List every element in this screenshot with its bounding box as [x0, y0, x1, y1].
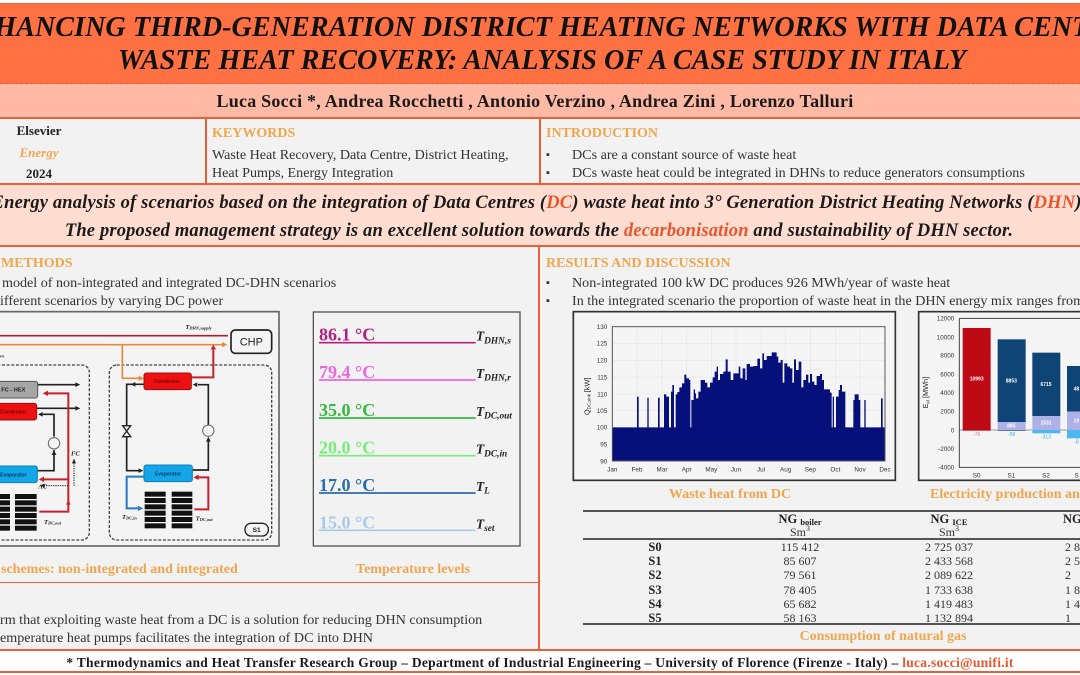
y axis labels: 6000 — [940, 371, 955, 378]
right scheme: DC,out — [199, 517, 213, 522]
y axis labels — [937, 316, 955, 472]
bar S1: 885 — [1007, 424, 1016, 430]
row S5 — [648, 611, 1071, 625]
row S2 — [648, 568, 1071, 582]
right scheme: T — [122, 514, 126, 521]
y axis labels: 105 — [597, 408, 608, 415]
bar S3: 48 — [1074, 387, 1079, 393]
level: T set: T — [476, 516, 484, 531]
bar S0: 10993 — [970, 377, 984, 383]
methods bullets — [0, 275, 336, 309]
x axis labels: Jun — [731, 466, 742, 473]
x axis labels: Oct — [830, 466, 840, 473]
row S2: 2 089 622 — [925, 568, 973, 582]
y axis labels: 8000 — [940, 353, 955, 360]
level: T DC,in — [319, 438, 507, 459]
y axis labels: 2000 — [940, 409, 955, 416]
results bullets: In the integrated scenario the proportion of waste heat in the DHN energy mix ranges from — [572, 293, 1080, 309]
level: T DHN,s: T — [476, 329, 484, 344]
y axis labels: 130 — [597, 324, 608, 331]
methods heading: METHODS — [1, 256, 73, 271]
introduction heading: INTRODUCTION — [546, 126, 658, 141]
row S1: S1 — [648, 554, 662, 568]
level: T L: T — [476, 479, 484, 494]
chart: waste heat from DC — [572, 310, 896, 482]
y axis labels: 90 — [600, 458, 608, 465]
row S1 — [648, 554, 1080, 568]
diagram: non-integrated and integrated schemes: rn — [0, 353, 5, 358]
bar S2 — [1032, 353, 1060, 440]
table header: NG ICE — [930, 512, 968, 527]
y axis title: [MWh] — [921, 377, 930, 400]
CHP box — [231, 330, 272, 353]
row S0: 2 725 037 — [925, 540, 973, 554]
bar S1 — [998, 339, 1026, 438]
supply and return lines — [0, 336, 228, 381]
table rules — [583, 510, 1080, 540]
introduction bullets: ▪ — [546, 149, 550, 161]
journal name: Energy — [20, 145, 58, 160]
bar S3 — [1067, 366, 1080, 445]
row S2: S2 — [648, 568, 662, 582]
level: T DHN,s: 86.1 °C — [319, 325, 375, 345]
y axis labels: 4000 — [940, 390, 955, 397]
methods bullets: ifferent scenarios by varying DC power — [0, 293, 223, 309]
bar S0: -76 — [973, 432, 980, 438]
keywords text — [212, 147, 509, 181]
level: T set — [319, 512, 495, 534]
row S3: 78 405 — [784, 583, 816, 597]
left scheme: FC — [71, 450, 80, 457]
conclusions text: rm that exploiting waste heat from a DC is a solution for reducing DHN consumption — [0, 612, 482, 628]
conclusions text: emperature heat pumps facilitates the integration of DC into DHN — [0, 630, 373, 646]
y axis title: Q — [582, 409, 591, 415]
x axis labels: S — [1075, 473, 1079, 480]
right scheme — [122, 373, 268, 536]
table bottom rule — [583, 623, 1080, 625]
bar S0 — [963, 328, 991, 438]
introduction bullets: DCs waste heat could be integrated in DHNs to reduce generators consumptions — [572, 165, 1025, 181]
table header — [778, 512, 1080, 538]
x axis labels: Nov — [854, 466, 866, 473]
keywords heading: KEYWORDS — [212, 126, 295, 141]
introduction bullets — [546, 147, 1025, 181]
bar S2: 1531 — [1040, 421, 1052, 427]
row S4 — [648, 597, 1080, 611]
right scheme: Evaporator — [155, 472, 181, 478]
level: T L: L — [483, 487, 490, 497]
row S4: 1 419 483 — [925, 597, 973, 611]
row S3 — [648, 583, 1080, 597]
x axis labels: Mar — [657, 466, 667, 473]
caption: natural gas: Consumption of natural gas — [800, 629, 966, 644]
level: T DHN,r: T — [476, 366, 484, 381]
y axis labels: 10000 — [937, 334, 955, 341]
authors: Luca Socci *, Andrea Rocchetti , Antonio Verzino , Andrea Zini , Lorenzo Talluri — [217, 91, 853, 111]
publisher: Elsevier — [17, 123, 61, 138]
level: T DHN,r: 79.4 °C — [319, 362, 375, 382]
level: T DHN,s — [319, 325, 511, 346]
affiliation: * Thermodynamics and Heat Transfer Research Group – Department of Industrial Engineering – University of Florence (Firenze - Italy) – luca.socci@unifi.it — [66, 655, 1014, 670]
left scheme: T — [44, 519, 48, 526]
y axis labels: 12000 — [937, 316, 955, 323]
x axis labels: S0 — [973, 473, 981, 480]
panel: results and discussion — [540, 247, 1080, 650]
row S2: 2 — [1065, 568, 1071, 582]
panel: keywords — [207, 117, 541, 185]
row S3: 1 733 638 — [925, 583, 973, 597]
right scheme: T — [196, 515, 200, 522]
row S1: 2 433 568 — [925, 554, 973, 568]
table header: NG boiler — [778, 512, 822, 527]
left scheme: DC,out — [47, 521, 62, 526]
x axis labels — [607, 466, 891, 473]
x axis labels: Jul — [757, 466, 765, 473]
row S0: S0 — [648, 540, 662, 554]
y axis labels: 125 — [597, 341, 608, 348]
level: T DC,out: 35.0 °C — [319, 400, 375, 420]
y axis labels: 100 — [597, 425, 608, 432]
y axis title: DC,sink — [587, 393, 592, 409]
results bullets — [546, 275, 1080, 309]
row S0: 115 412 — [781, 540, 819, 554]
level: T DHN,s: DHN,s — [483, 336, 511, 346]
y axis labels: 110 — [597, 391, 608, 398]
y axis labels: 0 — [951, 427, 955, 434]
level: T set: set — [483, 524, 495, 534]
waste heat area — [612, 352, 885, 461]
results bullets: Non-integrated 100 kW DC produces 926 MWh/year of waste heat — [572, 275, 950, 291]
left scheme: Evaporator — [0, 473, 27, 479]
footer — [0, 649, 1080, 673]
level: T L: 17.0 °C — [319, 475, 375, 495]
caption: schemes: schemes: non-integrated and integrated — [1, 562, 238, 577]
left scheme: FC - HEX — [1, 387, 26, 393]
conclusions text — [0, 612, 482, 646]
summary line 2: The proposed management strategy is an excellent solution towards the decarbonisation and sustainability of DHN sector. — [65, 221, 1013, 241]
level: T DC,in: DC,in — [483, 449, 507, 459]
level: T DC,in: T — [476, 442, 484, 457]
authors band — [0, 84, 1080, 118]
chart: electricity production — [918, 310, 1080, 482]
y axis title: el — [925, 400, 930, 403]
y axis title: [kW] — [582, 377, 591, 394]
bar S1: -59 — [1008, 432, 1015, 438]
keywords text: Heat Pumps, Energy Integration — [212, 165, 393, 181]
y axis labels — [597, 324, 608, 465]
row S0 — [648, 540, 1080, 554]
level: T L — [319, 475, 490, 497]
results heading: RESULTS AND DISCUSSION — [546, 256, 731, 271]
bar S2: -313 — [1041, 434, 1051, 440]
y axis labels: -2000 — [938, 446, 955, 453]
y axis labels: 120 — [597, 358, 608, 365]
level: T DC,out: DC,out — [483, 412, 512, 422]
x axis labels: Dec — [879, 466, 891, 473]
bar S3: -8 — [1074, 439, 1079, 445]
panel: conclusions — [0, 583, 540, 650]
introduction bullets: DCs are a constant source of waste heat — [572, 147, 796, 163]
panel: methods — [0, 247, 540, 583]
level: T DHN,r — [319, 362, 511, 384]
row S4: 65 682 — [784, 597, 816, 611]
label: T DHN supply: T — [185, 324, 189, 331]
right scheme: S1 — [253, 527, 261, 534]
results bullets: ▪ — [546, 295, 550, 307]
level: T DC,out — [319, 400, 512, 422]
x axis labels: Jan — [607, 466, 618, 473]
y axis labels: 115 — [597, 374, 608, 381]
y axis labels: 95 — [600, 442, 608, 449]
introduction bullets: ▪ — [546, 167, 550, 179]
level: T DC,out: T — [476, 404, 484, 419]
row S1: 2 5 — [1065, 554, 1080, 568]
x axis labels: S2 — [1042, 473, 1050, 480]
summary line 1: Energy analysis of scenarios based on the integration of Data Centres (DC) waste heat into 3° Generation District Heating Networks (DHN). — [0, 193, 1080, 213]
x axis labels: S1 — [1007, 473, 1016, 480]
panel: introduction — [541, 117, 1080, 185]
caption: temperature levels: Temperature levels — [356, 562, 470, 577]
row S5: 1 132 894 — [925, 611, 973, 625]
summary band — [0, 185, 1080, 247]
results bullets: ▪ — [546, 277, 550, 289]
row S2: 79 561 — [784, 568, 816, 582]
x axis labels: May — [705, 466, 718, 473]
CHP box: CHP — [240, 337, 263, 349]
year: 2024 — [26, 166, 52, 181]
bar S1: 8853 — [1006, 378, 1017, 384]
level: T set: 15.0 °C — [319, 512, 375, 532]
level: T DHN,r: DHN,r — [483, 374, 511, 384]
row S5: 58 163 — [784, 611, 816, 625]
right scheme: DC,in — [125, 516, 137, 521]
y axis title: E — [921, 403, 930, 408]
row S5: 1 — [1065, 611, 1071, 625]
bar S3: 19 — [1074, 419, 1079, 425]
row S4: 1 4 — [1065, 597, 1080, 611]
caption: waste heat: Waste heat from DC — [669, 487, 791, 502]
x axis labels: Aug — [780, 466, 792, 473]
left scheme — [0, 381, 80, 531]
x axis labels: Feb — [632, 466, 643, 473]
row S5: S5 — [648, 611, 662, 625]
diagram: non-integrated and integrated schemes — [0, 310, 280, 547]
panel: journal — [0, 117, 207, 185]
label: T DHN supply: DHN,supply — [188, 326, 212, 331]
row S4: S4 — [648, 597, 662, 611]
keywords text: Waste Heat Recovery, Data Centre, District Heating, — [212, 147, 509, 163]
left scheme: Condenser — [0, 409, 26, 415]
row S3: S3 — [648, 583, 662, 597]
title line 2: WASTE HEAT RECOVERY: ANALYSIS OF A CASE STUDY IN ITALY — [118, 45, 966, 76]
bar S2: 6715 — [1040, 382, 1052, 388]
x axis labels: Sep — [805, 466, 816, 473]
right scheme: Condenser — [154, 379, 180, 385]
title banner — [0, 3, 1080, 84]
row S1: 85 607 — [784, 554, 816, 568]
x axis labels — [973, 473, 1079, 480]
x axis labels: Apr — [682, 466, 692, 473]
row S3: 1 8 — [1065, 583, 1080, 597]
left scheme: AC — [37, 484, 48, 491]
y axis labels: -4000 — [938, 465, 955, 472]
temperature levels chart — [312, 311, 521, 547]
methods bullets: model of non-integrated and integrated DC-DHN scenarios — [2, 275, 336, 291]
level: T DC,in: 20.0 °C — [319, 438, 375, 458]
row S0: 2 8 — [1065, 540, 1080, 554]
